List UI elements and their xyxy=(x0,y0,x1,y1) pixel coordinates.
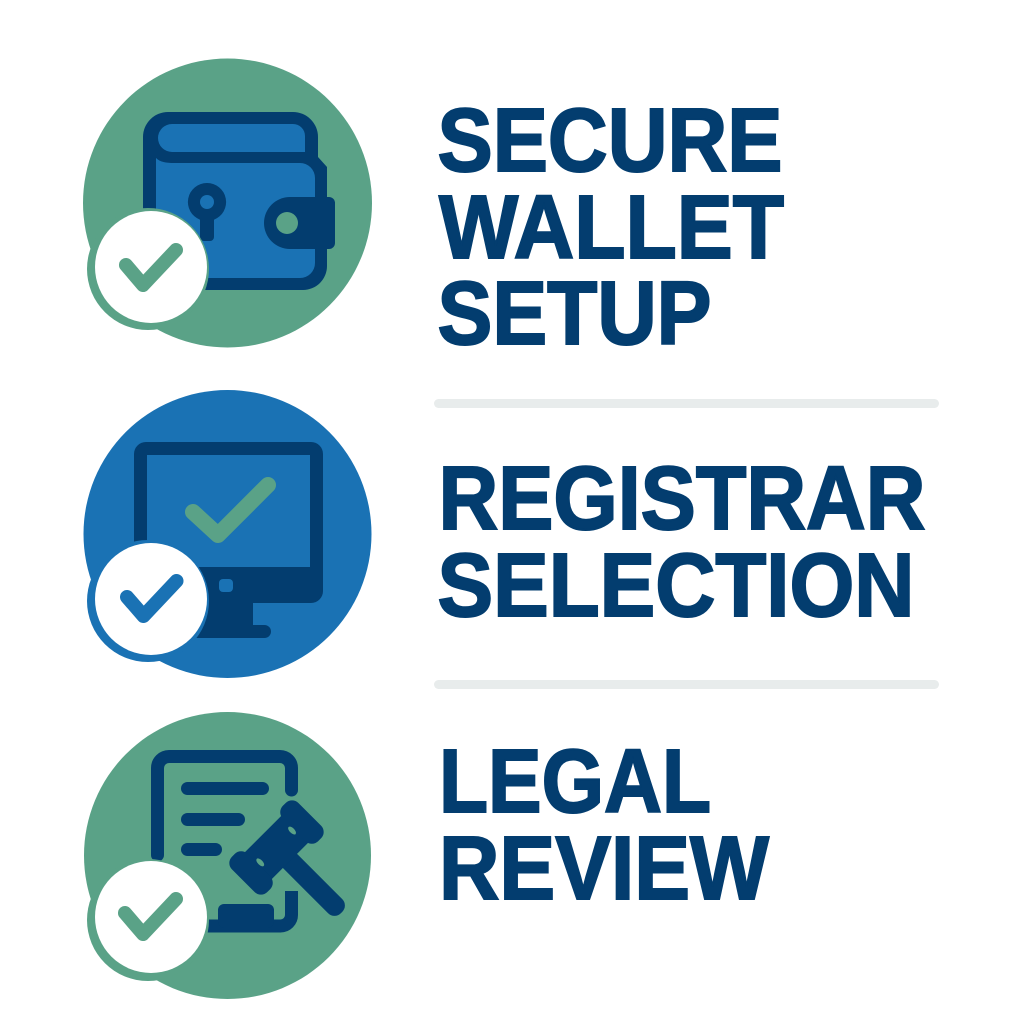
heading: registrar selection xyxy=(438,449,926,636)
heading: secure wallet setup: WALLET xyxy=(439,178,784,278)
check badge xyxy=(87,540,209,662)
icon: gavel xyxy=(226,797,375,946)
heading: registrar selection: REGISTRAR xyxy=(438,449,926,549)
heading: legal review xyxy=(439,732,769,919)
heading: registrar selection: SELECTION xyxy=(438,536,914,636)
heading: secure wallet setup: SECURE xyxy=(438,91,782,191)
panel: legal review icon xyxy=(84,712,375,999)
icon: monitor xyxy=(134,442,323,638)
check badge xyxy=(87,859,209,981)
panel: registrar selection icon xyxy=(84,390,372,678)
heading: secure wallet setup xyxy=(438,91,784,364)
icon: document xyxy=(151,756,292,928)
panel: secure wallet icon xyxy=(83,58,372,348)
icon background circle xyxy=(84,390,372,678)
icon background circle xyxy=(83,58,372,348)
icon: wallet xyxy=(143,112,335,290)
heading: legal review: REVIEW xyxy=(439,819,769,919)
check badge xyxy=(87,208,209,330)
heading: legal review: LEGAL xyxy=(439,732,711,832)
heading: secure wallet setup: SETUP xyxy=(438,264,712,364)
icon background circle xyxy=(84,712,371,999)
